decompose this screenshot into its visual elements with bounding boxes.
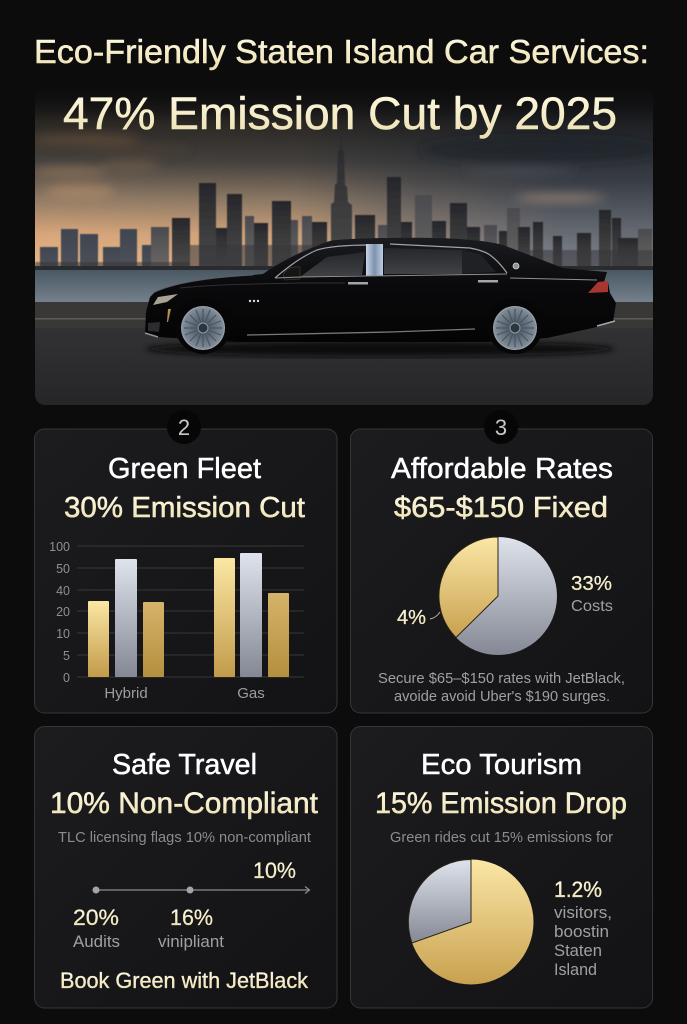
city skyline [35,133,653,267]
road [35,328,653,405]
shoulder line [180,283,345,288]
fade into page at top of photo [35,100,178,106]
tall spire tower [330,144,353,241]
headlight [153,294,178,305]
label 33% costs: Costs [571,598,613,615]
heading: Green Fleet [108,453,261,485]
title line 1: Eco-Friendly Staten Island Car Services: [34,33,649,70]
label 4% with leader: 4% [397,607,426,629]
panel box [34,726,337,1008]
axis labels [49,540,70,685]
subheading: 30% Emission Cut [64,492,305,524]
waterfront strip [35,266,653,270]
title line 2: 47% Emission Cut by 2025 [63,88,617,139]
panel box [350,726,652,1008]
value 20% audits: 20% [73,905,119,930]
chrome pillar [366,244,383,276]
category label hybrid: Hybrid [104,685,148,702]
exhaust [597,321,615,326]
bars: gas [214,553,289,677]
limousine [145,238,616,354]
side mirror [283,267,300,280]
label 1.2% visitors [554,877,612,979]
panel: eco tourism [350,726,652,1008]
title [34,33,649,139]
label 33% costs [571,573,613,615]
value 16% vinipliant [158,905,224,951]
door handles [348,280,498,284]
hood highlight [155,275,253,292]
bar chart [49,540,304,702]
front lip [145,333,158,337]
subheading: 10% Non-Compliant [50,787,319,820]
description: avoide avoid Uber's $190 surges. [394,689,610,705]
belt line [275,274,597,280]
description [378,671,625,705]
heading: Eco Tourism [421,749,582,781]
label 33% costs: 33% [571,573,612,595]
timeline [73,858,310,951]
subheading: $65-$150 Fixed [394,492,608,524]
value 20% audits [73,905,120,951]
description: Green rides cut 15% emissions for [390,829,613,846]
label 1.2% visitors: boostin [554,923,609,941]
front window [300,252,365,277]
bars: hybrid [88,559,164,677]
tail light [588,281,608,293]
step badge 3 [484,410,518,444]
axis labels: 50 [56,562,70,576]
panel: green fleet [34,410,337,713]
rear window [384,248,462,274]
quarter glass [462,250,496,274]
front wheel [178,306,226,354]
value 16% vinipliant: 16% [170,905,213,930]
timeline dots [92,886,194,894]
heading: Affordable Rates [391,453,613,485]
value 16% vinipliant: vinipliant [158,933,224,951]
heading: Safe Travel [112,749,257,781]
panel box [350,429,652,713]
sea wall [35,302,653,328]
step badge 3: 3 [495,415,507,440]
rear wheel [492,306,540,354]
pie chart [439,537,557,655]
low foreground buildings [35,245,653,267]
hero photo: limousine and skyline [30,90,660,405]
bumper marker [167,309,171,322]
description: Secure $65–$150 rates with JetBlack, [378,671,625,687]
value 10%: 10% [253,858,296,883]
label 1.2% visitors: 1.2% [554,877,602,902]
axis labels: 40 [56,584,70,598]
label 1.2% visitors: Island [554,961,597,979]
axis labels: 100 [49,540,70,554]
window surround [275,244,507,278]
value 20% audits: Audits [73,933,120,951]
water [35,270,653,302]
sill chrome [247,329,475,335]
car shadow [145,341,615,357]
step badge 2 [167,410,201,444]
panel: safe travel [34,726,337,1008]
axis labels: 0 [63,671,70,685]
arrow line [96,886,310,894]
description: TLC licensing flags 10% non-compliant [58,829,312,846]
call to action: Book Green with JetBlack [60,968,309,993]
fender vent dots [249,300,259,302]
label 4% with leader [397,607,440,629]
panel box [34,429,337,713]
car body [145,238,616,342]
pie chart [408,859,534,984]
axis labels: 10 [56,627,70,641]
axis labels: 20 [56,605,70,619]
grille [148,322,160,332]
category label gas: Gas [237,685,265,702]
axis labels: 5 [63,649,70,663]
step badge 2: 2 [178,415,190,440]
subheading: 15% Emission Drop [375,787,627,820]
sky [35,104,653,266]
label 1.2% visitors: visitors, [554,904,612,922]
label 1.2% visitors: Staten [554,942,602,960]
panel: affordable rates [350,410,652,713]
trunk badge [513,263,519,269]
